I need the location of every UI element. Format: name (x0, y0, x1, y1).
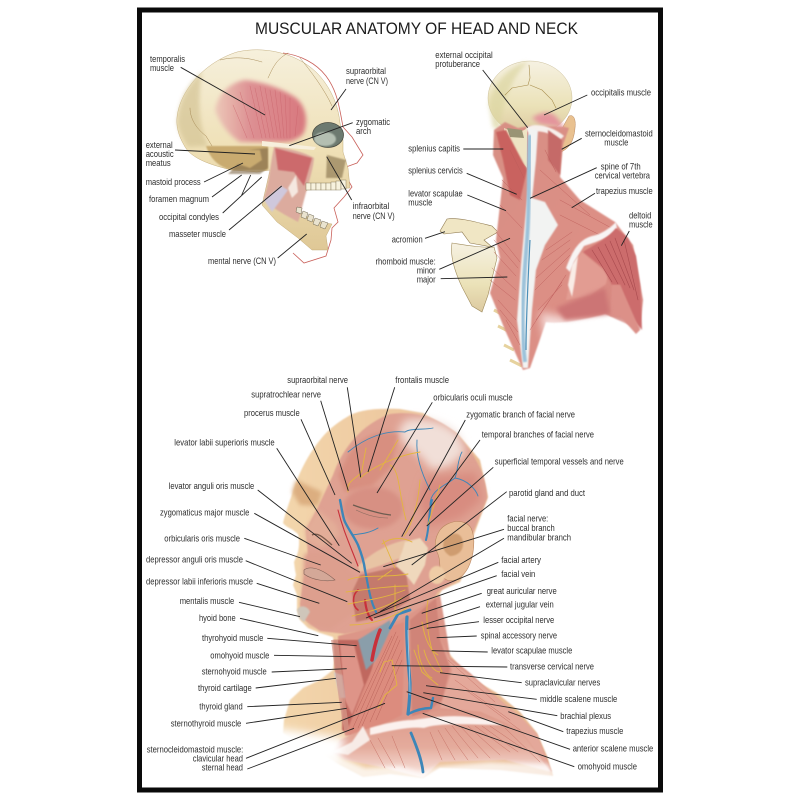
deltoid (583, 228, 642, 330)
callout: external jugular vein (409, 599, 554, 629)
zygomatic arch (262, 141, 316, 150)
callout: facial nerve branches: buccal branch (507, 523, 555, 533)
callout: spinal accessory nerve: spinal accessory nerve (481, 630, 557, 640)
callout: depressor anguli oris muscle: depressor anguli oris muscle (146, 555, 243, 565)
callout: supraorbital nerve (287, 375, 361, 477)
masseter red upper (275, 148, 312, 186)
callout: splenius capitis: splenius capitis (408, 144, 460, 154)
callout: parotid gland and duct (412, 488, 585, 565)
cranium and jaw bone (177, 50, 350, 250)
callout: brachial plexus: brachial plexus (560, 711, 611, 721)
shoulder skin fade (270, 728, 345, 775)
nose (305, 510, 340, 548)
callout: parotid gland and duct: parotid gland and duct (509, 488, 585, 498)
callout: occipitalis muscle (544, 88, 651, 115)
callout: external jugular vein: external jugular vein (486, 599, 554, 609)
callout: orbicularis oculi muscle: orbicularis oculi muscle (433, 392, 513, 402)
central white blue spine (517, 128, 558, 368)
callout: great auricular nerve: great auricular nerve (487, 586, 557, 596)
temporalis muscle (215, 80, 306, 142)
callout: temporal branches of facial nerve (409, 429, 594, 536)
lips (304, 568, 335, 581)
callout: infraorbital nerve (327, 157, 395, 221)
callout: levator anguli oris muscle (169, 481, 352, 563)
teres muscles (556, 288, 610, 320)
labels: head and neck left (146, 375, 385, 772)
lower teeth (296, 207, 328, 229)
callout: middle scalene muscle (426, 686, 617, 704)
callout: sternocleidomastoid muscle (562, 129, 653, 149)
callout: sternocleidomastoid muscle heads (147, 703, 385, 772)
forehead vessels (348, 428, 478, 505)
acromion (440, 219, 498, 247)
upper teeth (306, 180, 346, 190)
callout: levator scapulae muscle: levator scapulae (408, 188, 463, 198)
callout: zygomatic arch: arch (356, 126, 371, 136)
back skull shade (489, 62, 528, 130)
callout: lesser occipital nerve: lesser occipital nerve (483, 615, 554, 625)
callout: zygomatic arch: zygomatic (356, 117, 390, 127)
callout: levator labii superioris muscle: levator labii superioris muscle (174, 438, 275, 448)
callout: supraclavicular nerves: supraclavicular nerves (525, 678, 601, 688)
callout: anterior scalene muscle: anterior scalene muscle (573, 744, 653, 754)
labels: head and neck right (366, 375, 653, 771)
callout: facial nerve branches: mandibular branch (507, 532, 571, 542)
side temporal muscle (418, 472, 482, 528)
facial nerves (346, 440, 442, 708)
callout: rhomboid muscle: rhomboid muscle: (376, 257, 436, 267)
callout: levator anguli oris muscle: levator anguli oris muscle (169, 481, 254, 491)
callout: supraorbital nerve (331, 66, 388, 110)
callout: transverse cervical nerve: transverse cervical nerve (510, 661, 594, 671)
callout: facial vein (374, 569, 535, 618)
callout: orbicularis oris muscle: orbicularis oris muscle (164, 533, 240, 543)
illustration: posterior head and back (440, 61, 648, 370)
callout: occipitalis muscle: occipitalis muscle (591, 88, 651, 98)
callout: supratrochlear nerve (251, 390, 348, 491)
callout: external acoustic meatus: meatus (146, 158, 171, 168)
galea pale (398, 419, 466, 470)
galea white band (526, 125, 564, 140)
callout: trapezius muscle (508, 712, 623, 736)
callout: splenius cervicis (408, 165, 517, 194)
chest fibres (370, 660, 540, 768)
callout: spine of 7th cervical vertebra: cervical vertebra (595, 170, 651, 180)
callout: anterior scalene muscle (407, 692, 653, 754)
occipitalis pink (532, 113, 565, 128)
lower arm muscles (610, 285, 640, 334)
dark brow socket (292, 480, 322, 506)
callout: omohyoid muscle: omohyoid muscle (210, 651, 269, 661)
callout: acromion: acromion (392, 235, 423, 245)
callout: omohyoid muscle: omohyoid muscle (578, 761, 637, 771)
orbit (312, 122, 344, 148)
posterior triangle (410, 598, 450, 716)
callout: superficial temporal vessels and nerve (427, 457, 624, 526)
skin outline of face (283, 53, 363, 263)
back skull (488, 61, 572, 135)
zygomaticus band (358, 540, 412, 572)
callout: brachial plexus (423, 693, 611, 721)
back muscle fibres (490, 150, 615, 345)
illustration: anterolateral head and neck (270, 409, 560, 784)
callout: mastoid process (146, 163, 243, 187)
callout: supraorbital nerve: supraorbital (346, 66, 386, 76)
exposed cervical spine (504, 128, 527, 168)
callout: lesser occipital nerve (427, 615, 554, 628)
eye lid (353, 505, 391, 515)
orbit light (314, 132, 336, 146)
labels: posterior view (376, 50, 653, 285)
callout: sternocleidomastoid muscle heads: sternocleidomastoid muscle: (147, 745, 243, 755)
sternocleidomastoid (345, 622, 404, 736)
sutures (190, 53, 332, 146)
callout: omohyoid muscle (423, 713, 637, 771)
callout: hyoid bone: hyoid bone (199, 613, 236, 623)
scm fibres (352, 632, 402, 730)
callout: great auricular nerve (422, 586, 557, 613)
callout: rhomboid muscle: major (417, 275, 436, 285)
callout: levator scapulae muscle: levator scapulae muscle (491, 646, 572, 656)
callout: thyroid gland: thyroid gland (199, 702, 243, 712)
nasal cavity (326, 155, 346, 178)
face muscle layer (300, 413, 487, 634)
back muscle mass (490, 122, 643, 370)
strap muscles (340, 645, 364, 715)
title: MUSCULAR ANATOMY OF HEAD AND NECK (255, 19, 579, 38)
callout: rhomboid muscle (376, 238, 510, 285)
right side neck darker (548, 130, 562, 175)
facial vein and jugular (338, 500, 433, 772)
ear (435, 521, 474, 581)
callout: zygomaticus major muscle: zygomaticus major muscle (160, 507, 249, 517)
callout: splenius cervicis: splenius cervicis (408, 165, 463, 175)
callout: temporalis muscle: temporalis (150, 54, 185, 64)
chin grey (297, 606, 310, 622)
carotid region (358, 620, 392, 670)
callout: sternothyroid muscle: sternothyroid muscle (171, 719, 241, 729)
callout: orbicularis oculi muscle (377, 392, 513, 493)
callout: facial artery: facial artery (501, 555, 541, 565)
callout: mental nerve (208, 234, 307, 266)
forehead muscle (338, 432, 398, 492)
condyle dark detail (228, 148, 268, 174)
callout: sternohyoid muscle (202, 667, 347, 677)
callout: deltoid muscle: deltoid (629, 211, 651, 221)
back spine tail bones (494, 310, 522, 366)
callout: thyrohyoid muscle: thyrohyoid muscle (202, 633, 263, 643)
callout: temporalis muscle: muscle (150, 63, 174, 73)
callout: thyrohyoid muscle (202, 633, 357, 646)
lower fading (320, 755, 560, 784)
callout: acromion (392, 232, 445, 245)
callout: external acoustic meatus: acoustic (146, 149, 174, 159)
callout: sternohyoid muscle: sternohyoid muscle (202, 667, 267, 677)
callout: spinal accessory nerve (437, 630, 557, 640)
callout: foramen magnum (149, 175, 242, 204)
callout: external occipital protuberance: protuberance (435, 59, 480, 69)
callout: external acoustic meatus (146, 140, 255, 168)
callout: infraorbital nerve: nerve (CN V) (353, 211, 395, 221)
callout: trapezius muscle: trapezius muscle (566, 726, 623, 736)
callout: facial artery (366, 555, 541, 618)
callout: sternocleidomastoid muscle: muscle (604, 137, 628, 147)
callout: external acoustic meatus: external (146, 140, 173, 150)
callout: sternocleidomastoid muscle: sternocleidomastoid (585, 129, 653, 139)
ear lobe (429, 566, 445, 584)
ear (560, 116, 575, 152)
callout: mentalis muscle (180, 596, 300, 617)
callout: splenius capitis (408, 144, 503, 154)
neck base muscle (338, 595, 552, 772)
masseter tendon pale (264, 186, 288, 212)
callout: occipital condyles: occipital condyles (159, 212, 219, 222)
temporalis fibres (233, 86, 298, 138)
callout: orbicularis oris muscle (164, 533, 321, 565)
deltoid fibres (592, 238, 638, 300)
callout: occipital condyles (159, 175, 262, 222)
callout: supraorbital nerve: supraorbital nerve (287, 375, 348, 385)
callout: infraorbital nerve: infraorbital (353, 201, 389, 211)
scapula blade (451, 243, 497, 312)
orbicularis oculi (343, 487, 403, 529)
callout: masseter muscle (169, 186, 282, 239)
callout: facial nerve branches: facial nerve: (507, 514, 548, 524)
callout: facial nerve branches (380, 514, 571, 612)
masseter muscle (264, 147, 314, 222)
callout: temporalis muscle (150, 54, 265, 115)
callout: supratrochlear nerve: supratrochlear nerve (251, 390, 321, 400)
callout: hyoid bone (199, 613, 318, 636)
lower edge fade (540, 312, 648, 350)
callout: zygomatic branch of facial nerve: zygomatic branch of facial nerve (466, 409, 575, 419)
callout: depressor anguli oris muscle (146, 555, 347, 602)
inner ear (443, 534, 463, 556)
callout: supraorbital nerve: nerve (CN V) (346, 76, 388, 86)
callout: trapezius muscle: trapezius muscle (596, 186, 653, 196)
callout: external occipital protuberance: external occipital (435, 50, 493, 60)
callout: zygomatic arch (289, 117, 390, 146)
callout: rhomboid muscle: minor (417, 266, 436, 276)
callout: sternothyroid muscle (171, 708, 347, 729)
callout: spine of 7th cervical vertebra: spine of 7th (601, 161, 641, 171)
sutures back (505, 65, 556, 108)
tracheal skin edge (331, 640, 350, 735)
callout: levator scapulae muscle: muscle (408, 197, 432, 207)
callout: procerus muscle (244, 408, 335, 495)
callout: superficial temporal vessels and nerve: superficial temporal vessels and nerve (495, 457, 624, 467)
callout: zygomaticus major muscle (160, 507, 360, 572)
carotid artery (372, 630, 380, 660)
callout: middle scalene muscle: middle scalene muscle (540, 694, 617, 704)
infraspinatus (566, 252, 608, 300)
callout: frontalis muscle (368, 375, 449, 472)
callout: levator scapulae muscle (408, 188, 506, 211)
pale gap (568, 256, 578, 297)
thyroid cartilage (334, 672, 345, 698)
masseter area (352, 565, 410, 622)
occipital shading (177, 72, 208, 147)
callout: mentalis muscle: mentalis muscle (180, 596, 234, 606)
callout: thyroid cartilage (198, 678, 336, 693)
chest and clavicle region (330, 710, 551, 778)
callout: depressor labii inferioris muscle (146, 577, 319, 603)
callout: thyroid cartilage: thyroid cartilage (198, 683, 252, 693)
clavicle white band (370, 716, 503, 735)
cheek muscle (302, 552, 358, 630)
callout: procerus muscle: procerus muscle (244, 408, 300, 418)
callout: thyroid gland (199, 702, 342, 712)
callout: depressor labii inferioris muscle: depressor labii inferioris muscle (146, 577, 253, 587)
callout: deltoid muscle (621, 211, 653, 246)
callout: supraclavicular nerves (440, 673, 601, 688)
callout: foramen magnum: foramen magnum (149, 194, 209, 204)
illustration: lateral skull (177, 50, 363, 263)
callout: temporal branches of facial nerve: temporal branches of facial nerve (482, 429, 594, 439)
callout: levator labii superioris muscle (174, 438, 339, 546)
callout: external occipital protuberance (435, 50, 528, 128)
parotid gland (396, 538, 428, 585)
neck throat dark gap (333, 635, 380, 735)
callout: mastoid process: mastoid process (146, 177, 201, 187)
callout: mental nerve: mental nerve (CN V) (208, 256, 276, 266)
callout: trapezius muscle (572, 186, 653, 208)
trapezius (440, 640, 551, 772)
callout: zygomatic branch of facial nerve (402, 409, 575, 537)
callout: deltoid muscle: muscle (629, 219, 653, 229)
callout: sternocleidomastoid muscle heads: clavicular head (193, 753, 243, 763)
sternal tendon (332, 726, 370, 755)
black poster frame (140, 10, 660, 790)
temporal bone (206, 146, 268, 170)
splenius red (496, 130, 527, 200)
callout: sternocleidomastoid muscle heads: sternal head (202, 762, 243, 772)
callout: masseter muscle: masseter muscle (169, 229, 226, 239)
callout: frontalis muscle: frontalis muscle (395, 375, 449, 385)
labels: skull (146, 54, 395, 266)
vertebrae dark (507, 128, 524, 138)
spine of scapula white (566, 222, 617, 272)
callout: facial vein: facial vein (501, 569, 535, 579)
callout: spine of 7th cervical vertebra (530, 161, 651, 198)
head and neck silhouette (283, 409, 553, 778)
nostril (312, 534, 332, 545)
